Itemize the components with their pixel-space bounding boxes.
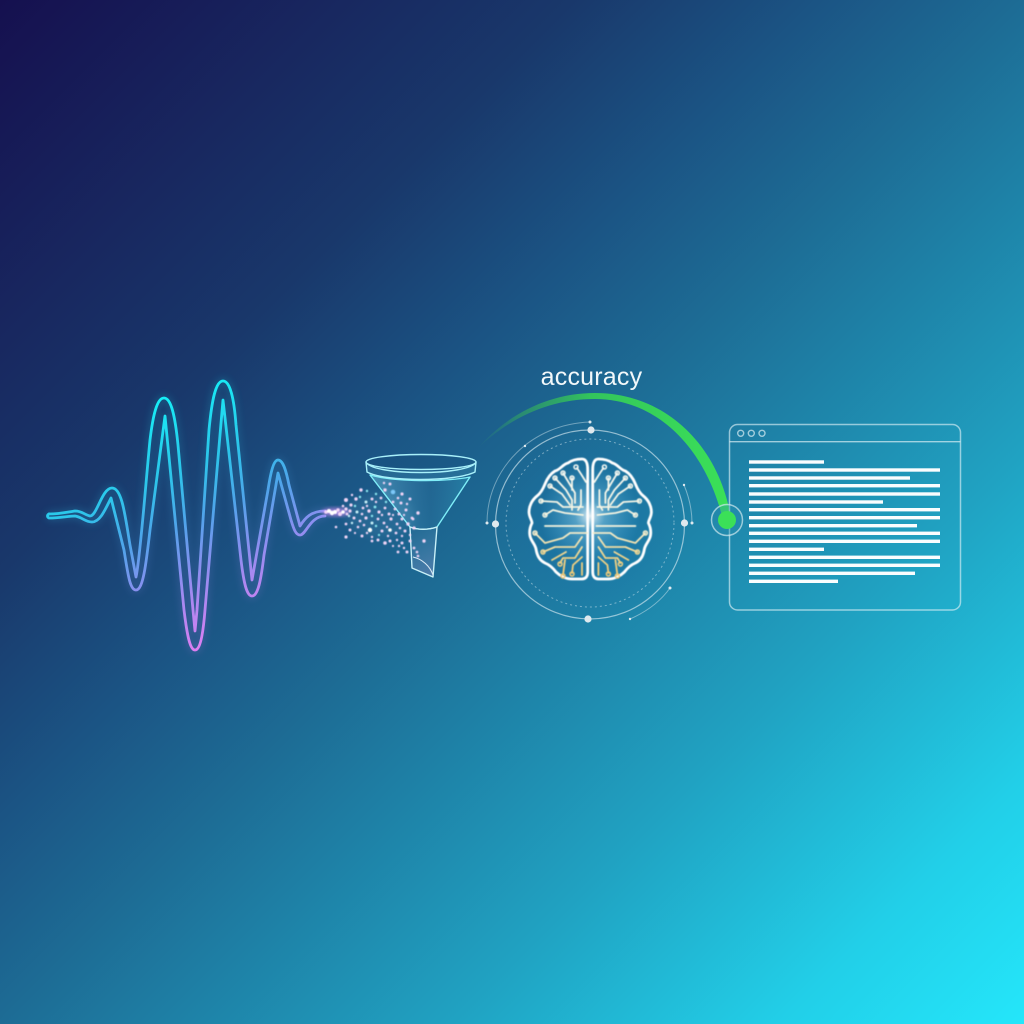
text lines bbox=[749, 460, 940, 583]
accuracy label: accuracy bbox=[541, 363, 643, 391]
funnel bbox=[366, 454, 476, 577]
accuracy arc bbox=[476, 393, 731, 520]
brain left hemisphere bbox=[529, 459, 588, 579]
window title bar bbox=[730, 430, 960, 442]
ring nodes bbox=[486, 420, 694, 623]
brain glow bbox=[540, 466, 640, 566]
particle stream bbox=[322, 482, 426, 557]
accuracy endpoint marker bbox=[712, 504, 742, 536]
brain right hemisphere bbox=[593, 459, 651, 579]
waveform bbox=[48, 381, 325, 650]
outer ring bbox=[487, 422, 692, 619]
window frame bbox=[730, 424, 960, 610]
document window bbox=[730, 424, 960, 610]
brain ring diagram bbox=[486, 420, 694, 624]
